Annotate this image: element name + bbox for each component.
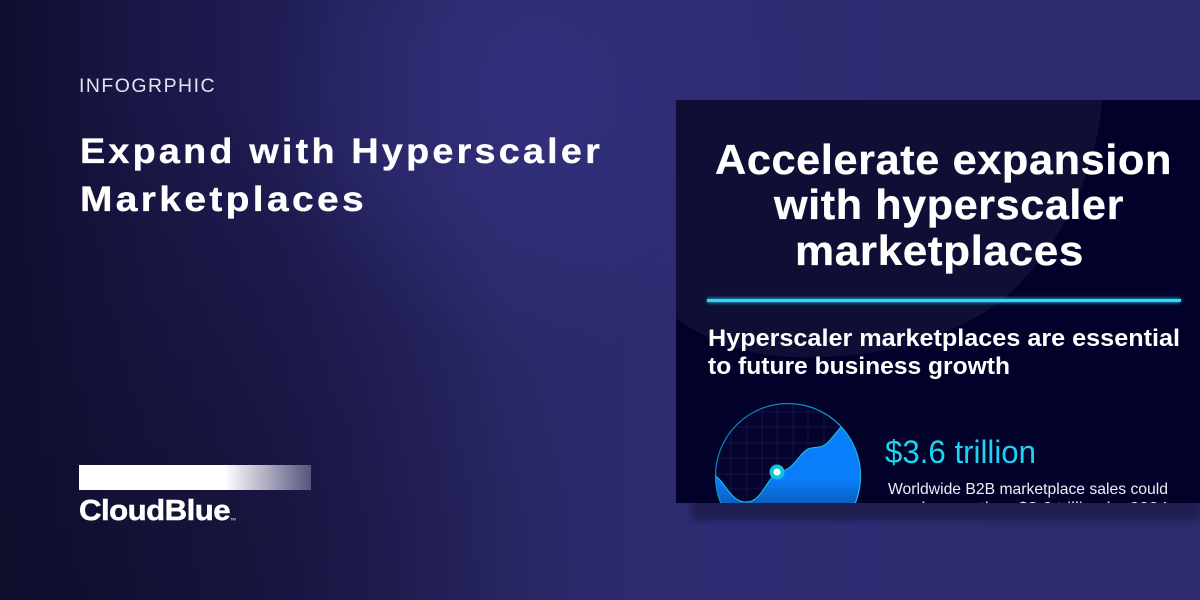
eyebrow label: INFOGRPHIC — [79, 75, 216, 97]
section heading — [708, 325, 1180, 380]
stat description: Worldwide B2B marketplace sales could — [888, 481, 1168, 498]
logo: CloudBlue: TM — [230, 516, 236, 522]
panel heading: Accelerate expansion — [715, 136, 1172, 183]
stat value: $3.6 trillion — [885, 434, 1036, 470]
area series — [715, 427, 861, 503]
panel heading — [715, 136, 1172, 274]
card shadow — [690, 503, 1200, 522]
page title: Expand with Hyperscaler — [80, 132, 603, 171]
logo: CloudBlue — [79, 465, 311, 527]
chart: circular area chart — [714, 402, 862, 503]
page title — [80, 132, 603, 219]
panel: infographic preview — [676, 100, 1200, 503]
stat description: reach more than $3.6 trillion by 2024 — [888, 500, 1168, 517]
data point marker — [770, 464, 784, 480]
background — [0, 0, 753, 600]
logo: CloudBlue: CloudBlue — [79, 495, 230, 527]
panel heading: marketplaces — [795, 227, 1084, 274]
stat description — [888, 482, 1167, 503]
glowing divider — [707, 298, 1181, 303]
panel heading: with hyperscaler — [773, 181, 1124, 228]
section heading: Hyperscaler marketplaces are essential — [708, 325, 1180, 352]
page title: Marketplaces — [80, 180, 367, 219]
section heading: to future business growth — [708, 353, 1010, 380]
decorative lighter arc — [676, 100, 1102, 357]
